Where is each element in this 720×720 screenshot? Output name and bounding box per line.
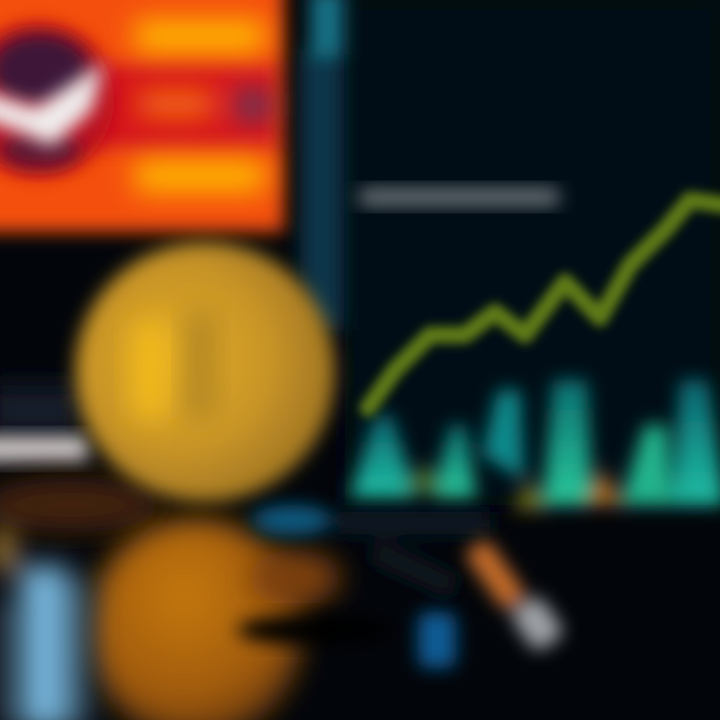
icon: gold coin bbox=[75, 242, 335, 502]
icon: logo badge bbox=[0, 24, 114, 176]
yellow bars bbox=[135, 20, 270, 192]
line chart: green trend bbox=[368, 200, 720, 408]
stand base bbox=[252, 505, 490, 600]
icon: pen bbox=[418, 537, 566, 668]
blurred caption bbox=[358, 188, 560, 206]
blue reflection strip bbox=[0, 530, 92, 720]
coin reflection bbox=[87, 518, 393, 720]
white ledge bbox=[0, 436, 88, 462]
brown table edge bbox=[0, 477, 160, 533]
bar chart bbox=[350, 380, 720, 510]
teal vertical stripe bbox=[300, 0, 344, 330]
lower left dark reflective surface bbox=[0, 385, 80, 435]
panel: monitor glow bbox=[345, 0, 720, 505]
panel: orange banner bbox=[0, 0, 284, 232]
